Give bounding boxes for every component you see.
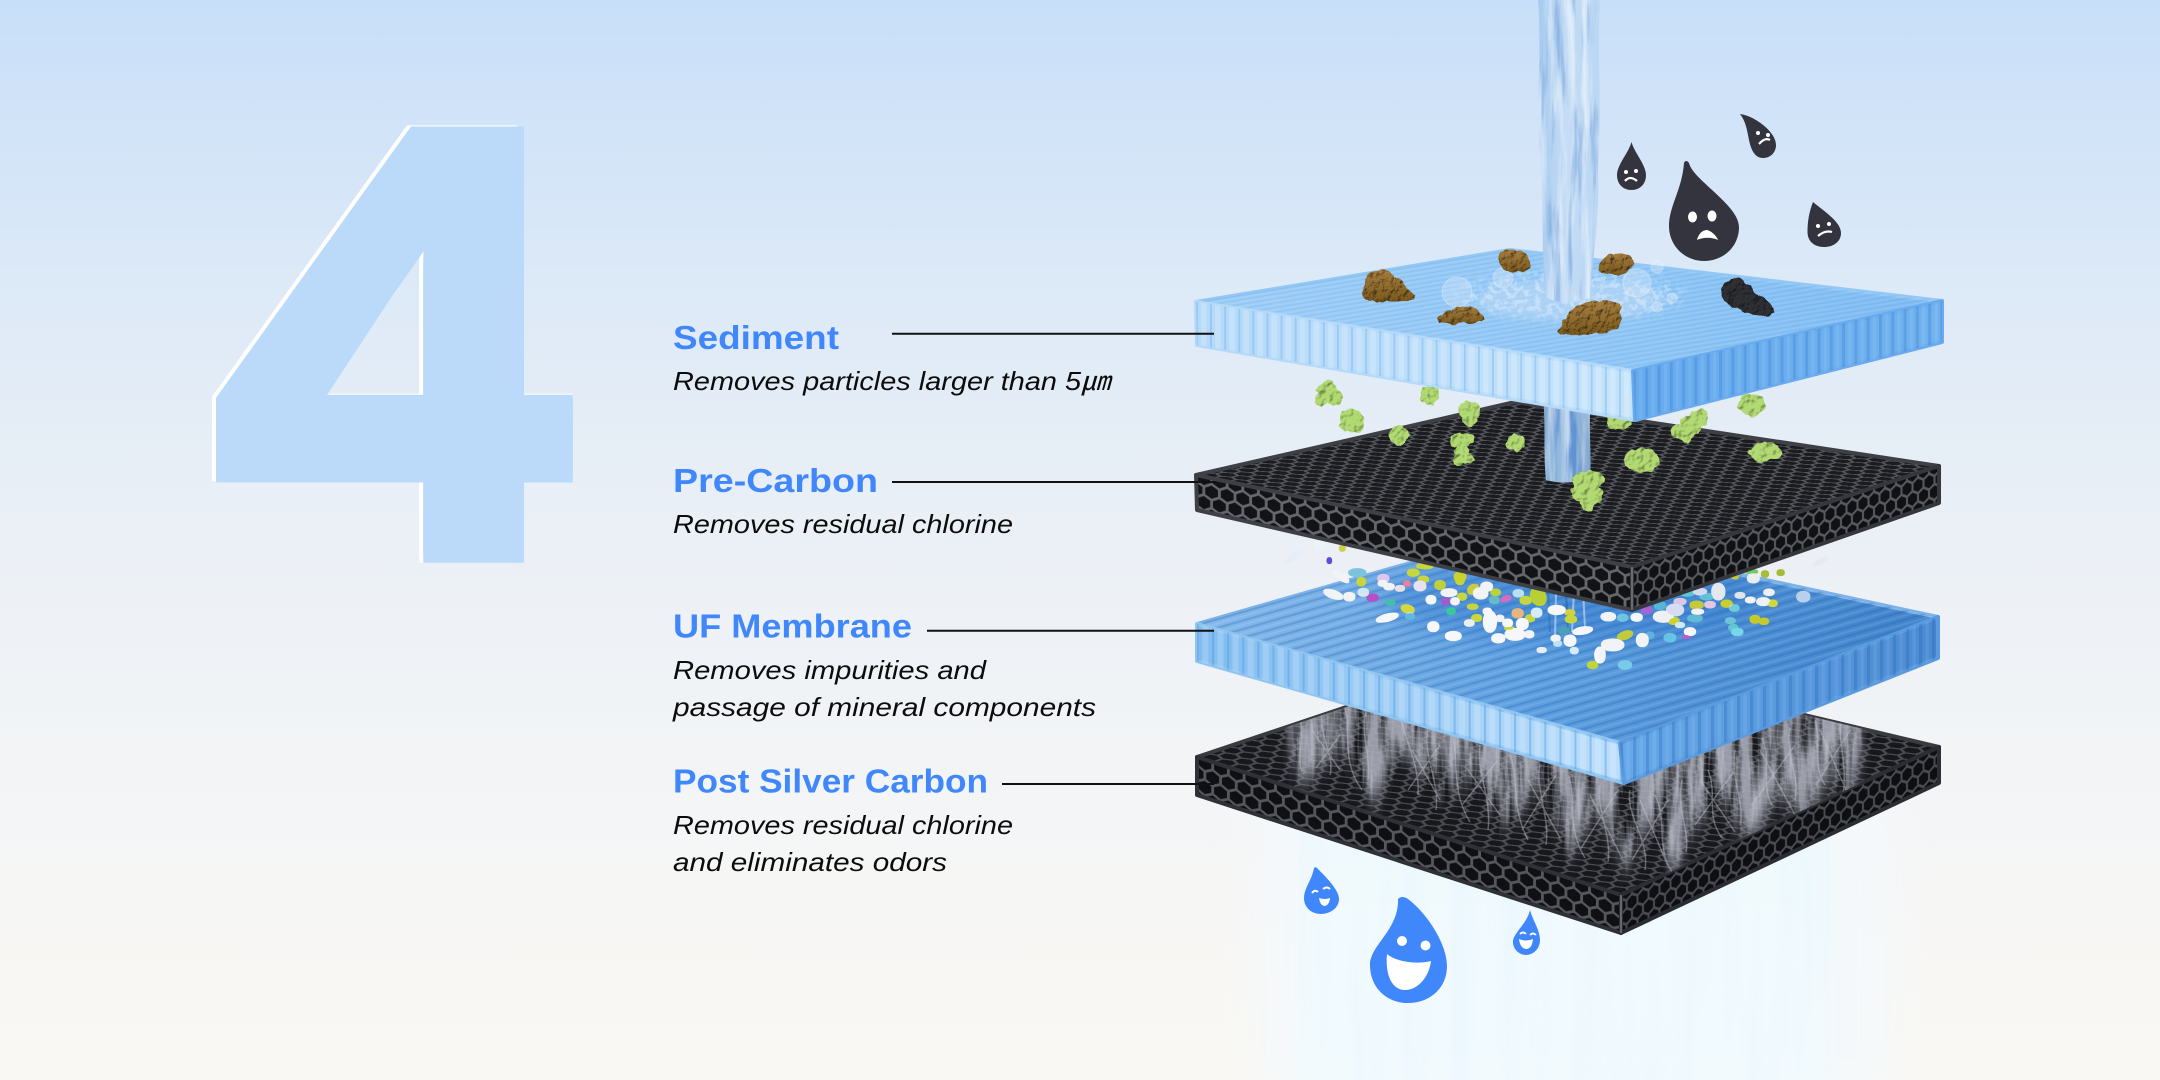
filter layer 3: UF membrane <box>1195 561 1940 786</box>
heading: UF Membrane <box>673 608 912 645</box>
big number 4: 4 <box>208 0 580 673</box>
description line 1: Removes residual chlorine <box>673 810 1013 840</box>
clump <box>1339 408 1364 433</box>
label: UF membrane <box>672 608 1214 722</box>
particles: left cluster <box>1283 541 1612 669</box>
label: pre-carbon <box>673 462 1214 539</box>
big number 4: 4 <box>214 8 587 680</box>
rock <box>1438 307 1485 323</box>
water stream under layer 2 <box>1548 590 1585 640</box>
clump <box>1572 470 1604 511</box>
clump <box>1420 385 1440 405</box>
heading: Pre-Carbon <box>673 462 878 499</box>
filter layer 4: post silver carbon <box>1197 648 1939 933</box>
icon: small happy drop left <box>1304 867 1339 914</box>
rock <box>1557 300 1621 335</box>
clump <box>1507 434 1525 452</box>
clump <box>1749 442 1781 462</box>
big number 4: 4 <box>214 2 587 674</box>
description line 1: Removes impurities and <box>673 655 988 685</box>
big number 4: 4 <box>208 4 580 677</box>
big number 4: 4 <box>208 16 580 689</box>
big number 4: 4 <box>212 18 584 690</box>
description: Removes residual chlorine <box>673 509 1013 539</box>
clump <box>1389 425 1409 445</box>
clump <box>1450 433 1474 466</box>
clump <box>1738 394 1766 416</box>
rock: black <box>1721 279 1774 315</box>
description: Removes particles larger than 5㎛ <box>673 366 1113 396</box>
clean water haze below filter <box>1255 800 1895 1080</box>
big number 4: 4 <box>214 18 587 690</box>
water splash and bubbles <box>1442 261 1685 320</box>
mineral and impurity particles <box>1283 541 1828 669</box>
description line 2: and eliminates odors <box>673 847 947 877</box>
rock <box>1599 253 1633 274</box>
particles: right cluster <box>1598 556 1828 669</box>
big number 4 <box>212 125 573 563</box>
grey mist fibres on layer 4 <box>1280 690 1870 875</box>
leader line <box>892 481 1214 483</box>
clump <box>1458 400 1480 426</box>
green chlorine clumps <box>1315 381 1781 511</box>
big number 4: 4 <box>212 8 584 680</box>
label: sediment <box>673 319 1214 396</box>
clump <box>1672 409 1708 442</box>
leader line <box>892 333 1214 335</box>
rock <box>1498 249 1531 274</box>
clump <box>1315 381 1343 405</box>
icon: big happy clean drop <box>1370 897 1447 1003</box>
leader line <box>927 630 1214 632</box>
heading: Post Silver Carbon <box>673 763 988 800</box>
icon: small sad drop top right <box>1740 114 1776 158</box>
clump <box>1606 412 1632 430</box>
falling water stream <box>1538 0 1600 302</box>
rock <box>1363 270 1416 302</box>
water stream between layers 1 and 2 <box>1543 395 1591 483</box>
filter layer 2: pre-carbon <box>1196 402 1939 610</box>
heading: Sediment <box>673 319 839 356</box>
filter layer 1: sediment <box>1196 250 1942 420</box>
sediment rocks <box>1363 249 1774 335</box>
clump <box>1624 448 1660 472</box>
icon: small sad drop left <box>1617 142 1646 190</box>
icon: big sad dirty drop <box>1669 161 1739 261</box>
label: post silver carbon <box>673 763 1214 877</box>
big number 4: 4 <box>212 2 584 674</box>
leader line <box>1002 783 1214 785</box>
description line 2: passage of mineral components <box>672 692 1096 722</box>
icon: small happy drop right <box>1513 910 1540 955</box>
icon: small sad drop right <box>1808 202 1841 247</box>
